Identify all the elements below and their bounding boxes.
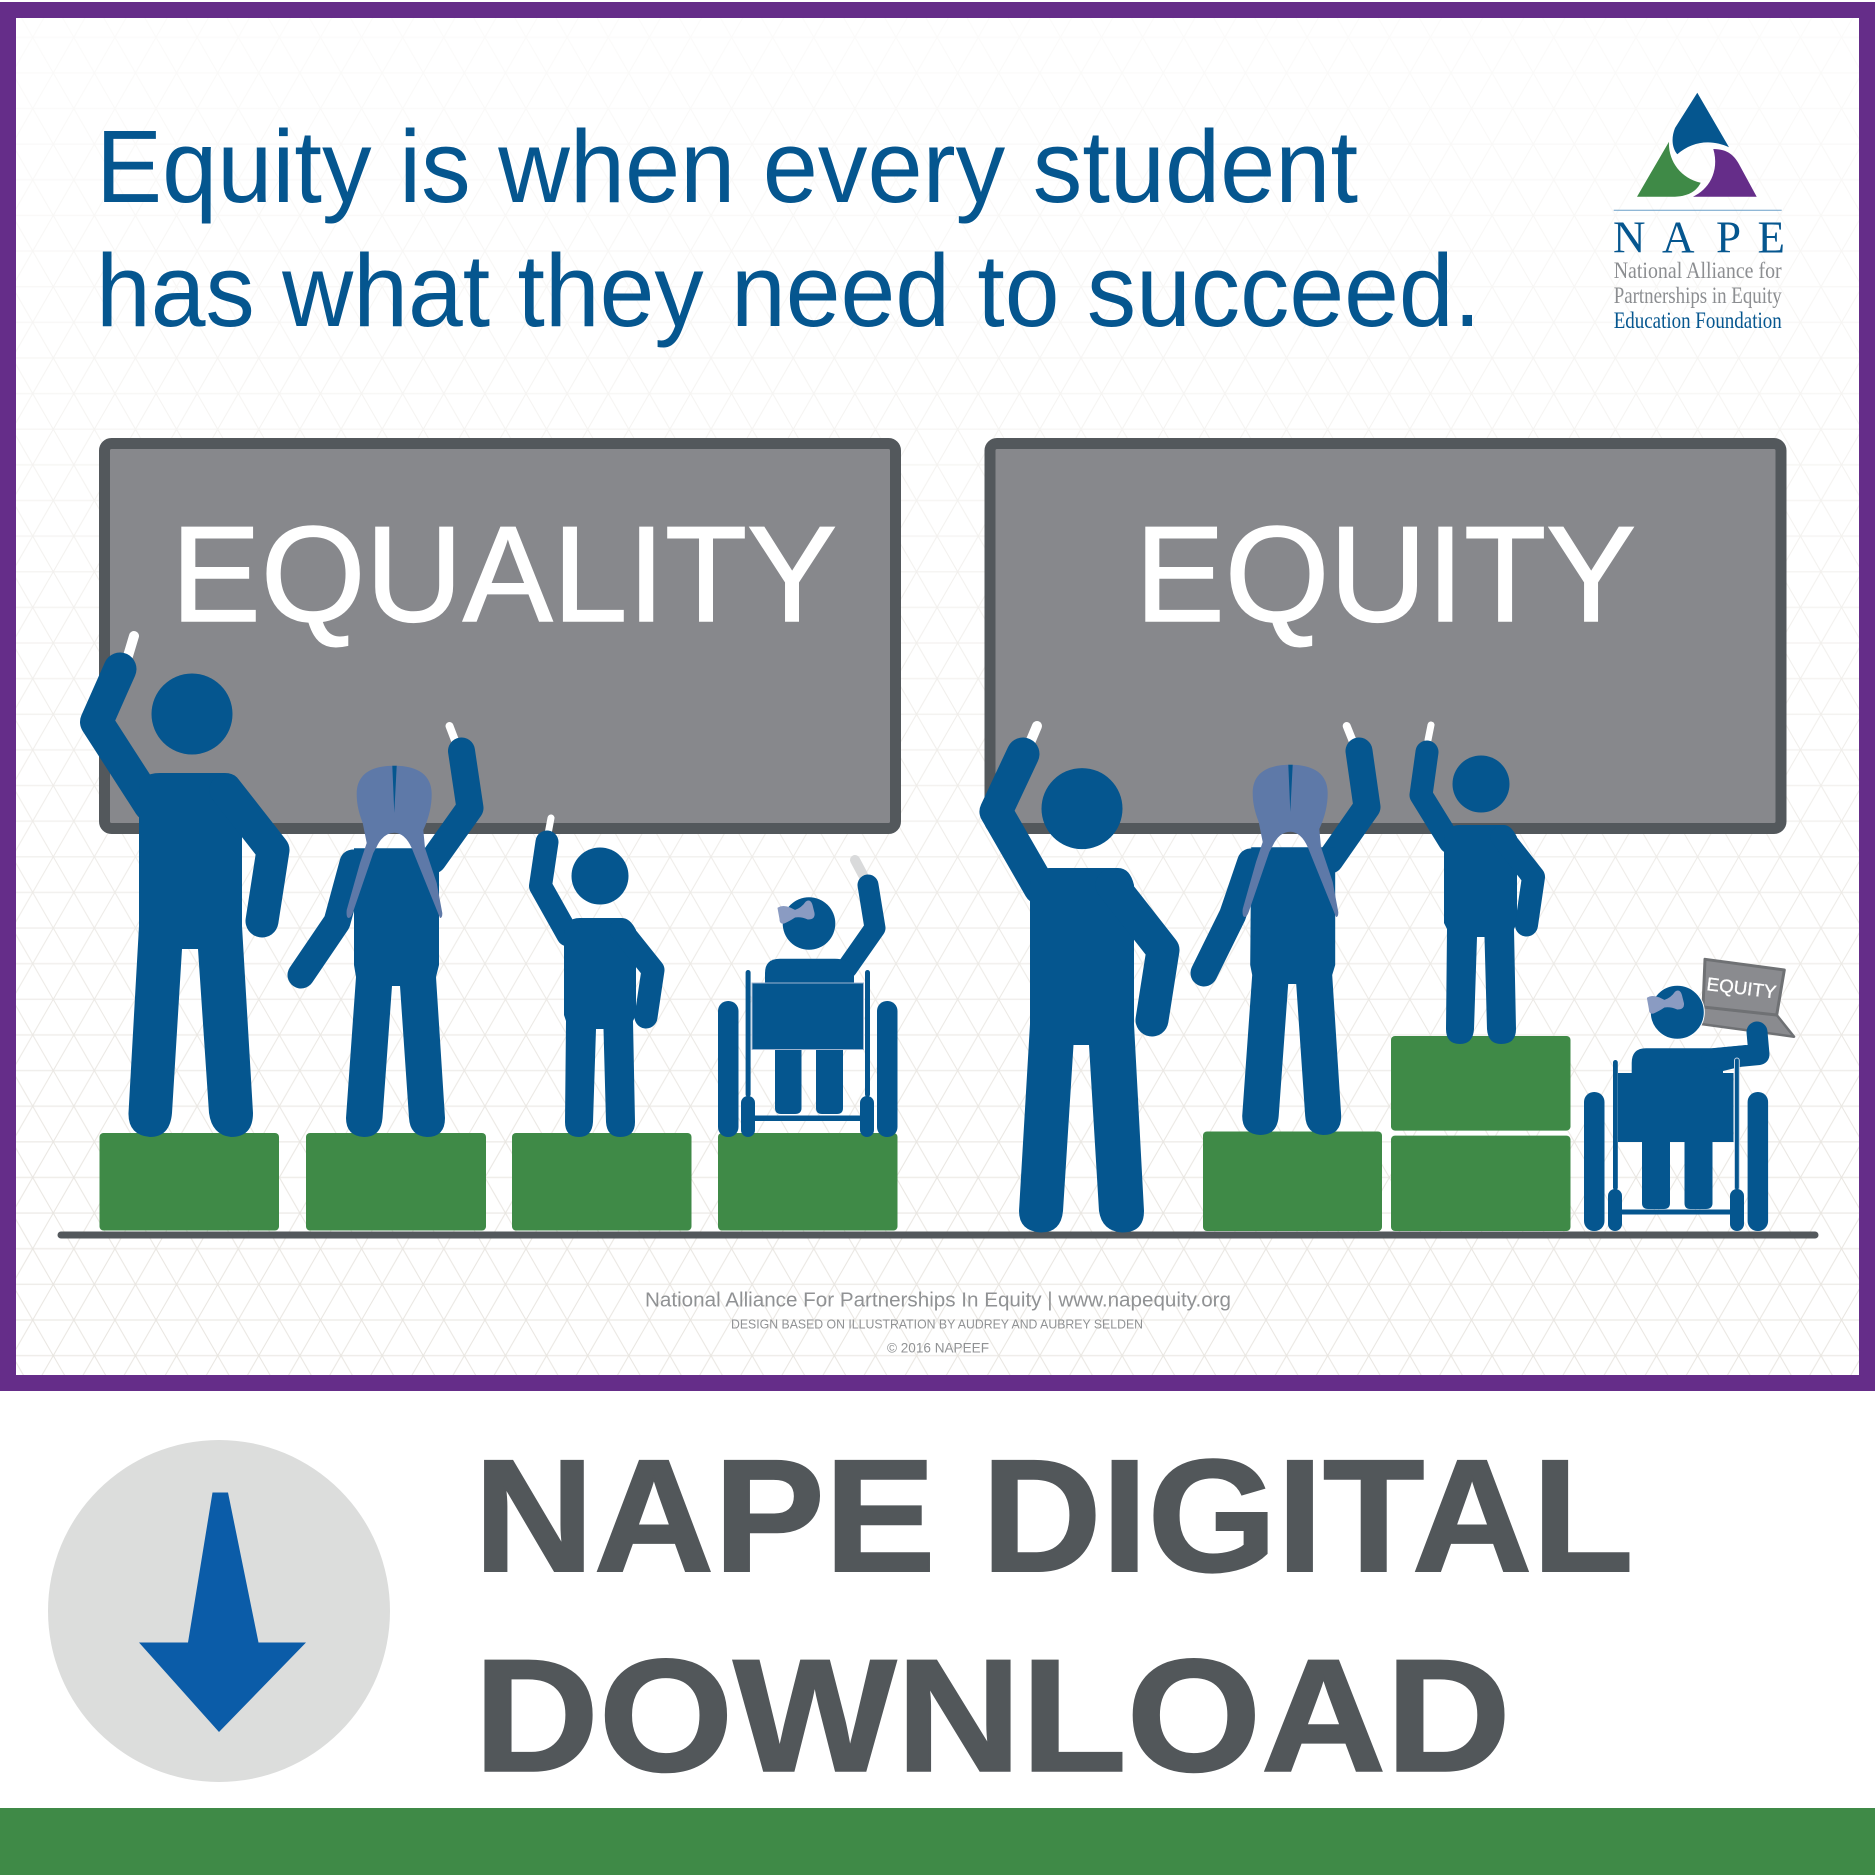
heading: equity: EQUITY bbox=[1135, 498, 1636, 650]
logo caption: National Alliance for bbox=[1614, 258, 1782, 283]
panel: equity board bbox=[990, 444, 1781, 828]
heading: equality: EQUALITY bbox=[171, 498, 837, 650]
download heading: DOWNLOAD bbox=[474, 1626, 1511, 1805]
logo caption: Partnerships in Equity bbox=[1614, 283, 1782, 308]
download heading: NAPE DIGITAL bbox=[474, 1426, 1634, 1605]
title bbox=[96, 109, 1481, 348]
icon: laptop with equity screen bbox=[1701, 959, 1794, 1037]
hair bow bbox=[778, 901, 814, 923]
figure: boy, equality bbox=[540, 818, 653, 1137]
title: Equity is when every student bbox=[96, 109, 1358, 224]
figure: girl with braids, equity bbox=[1204, 726, 1367, 1135]
title: has what they need to succeed. bbox=[96, 233, 1481, 348]
NAPE logo bbox=[1613, 93, 1785, 333]
logo wordmark: NAPE bbox=[1613, 213, 1785, 263]
logo mark: three-part triangle bbox=[1637, 93, 1757, 197]
footer credits: DESIGN BASED ON ILLUSTRATION BY AUDREY AND AUBREY SELDEN bbox=[731, 1318, 1143, 1332]
hair bow bbox=[1647, 991, 1684, 1013]
figure: tall man, equity bbox=[996, 726, 1163, 1232]
logo caption: Education Foundation bbox=[1614, 308, 1782, 333]
figure: tall man, equality bbox=[96, 636, 273, 1137]
green boxes bbox=[100, 1036, 1570, 1231]
laptop label: EQUITY bbox=[1706, 973, 1778, 1003]
figure: girl in wheelchair, equality bbox=[718, 860, 898, 1137]
figure: girl with braids, equality bbox=[301, 726, 470, 1137]
purple frame bbox=[0, 2, 1875, 1391]
hair bbox=[347, 766, 442, 918]
ground line bbox=[61, 1232, 1815, 1238]
logo caption bbox=[1614, 258, 1782, 333]
figure: boy on two boxes, equity bbox=[1421, 725, 1534, 1044]
panel: equality board bbox=[104, 444, 896, 828]
footer credits: © 2016 NAPEEF bbox=[887, 1340, 989, 1356]
footer credits: National Alliance For Partnerships In Equity | www.napequity.org bbox=[645, 1289, 1231, 1312]
footer credits bbox=[645, 1289, 1231, 1356]
hair bbox=[1243, 765, 1338, 917]
download heading bbox=[474, 1426, 1634, 1805]
green footer bar bbox=[0, 1808, 1875, 1875]
icon: download arrow in circle bbox=[48, 1440, 390, 1782]
figure: girl in wheelchair, equity bbox=[1584, 985, 1768, 1231]
